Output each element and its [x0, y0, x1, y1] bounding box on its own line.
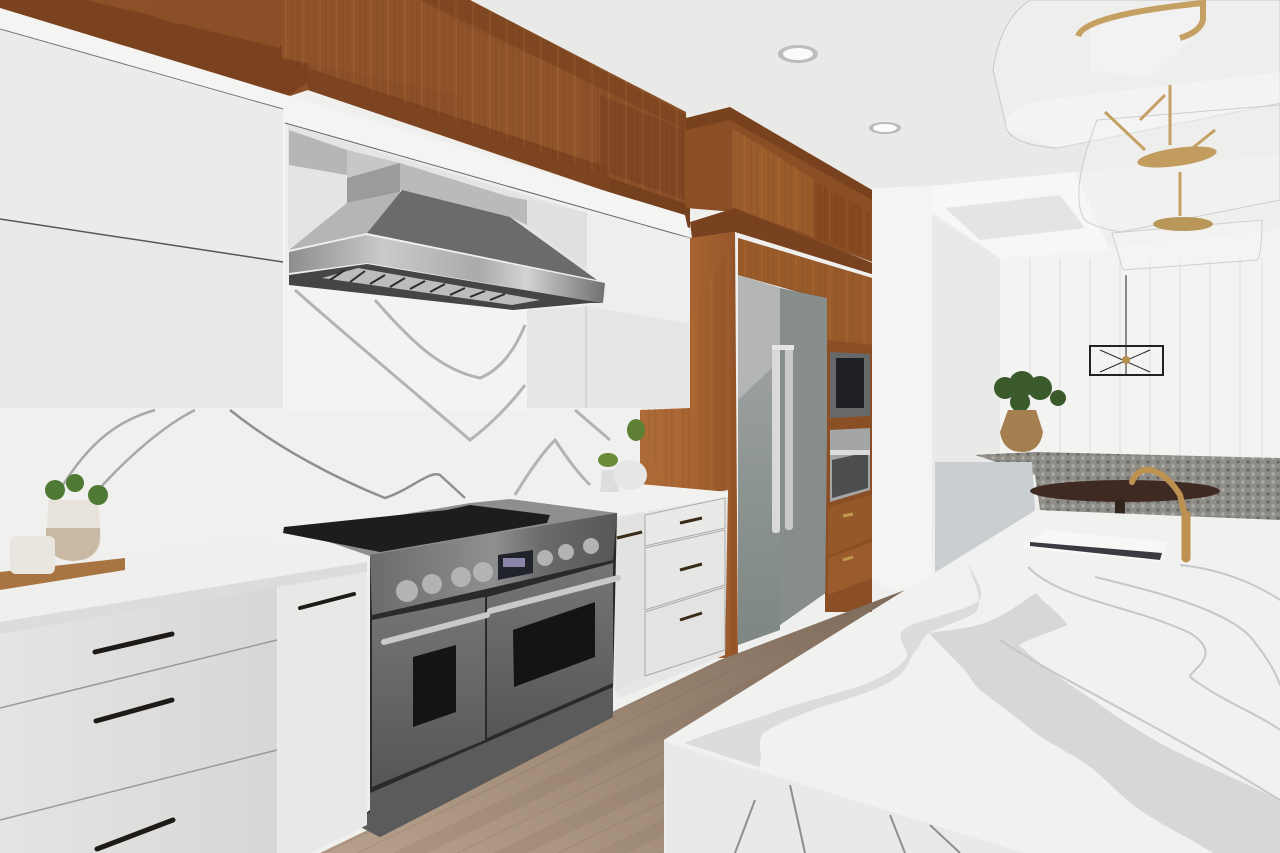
icon: potted plant and canister on tray — [0, 474, 125, 590]
icon: french-door refrigerator — [738, 275, 827, 645]
panel: left upper cabinets — [0, 8, 690, 408]
panel: right upper cabinets — [527, 213, 690, 408]
icon: small plants and vases — [598, 419, 647, 492]
panel: banquette and dining table — [935, 452, 1280, 572]
panel: floor — [320, 590, 905, 853]
icon: glass pendant lamps — [993, 0, 1280, 270]
recessed ceiling lights — [778, 45, 901, 134]
icon: gold faucet — [1132, 470, 1186, 558]
panel: marble backsplash — [0, 280, 640, 560]
icon: pendant lantern — [1090, 275, 1163, 375]
panel: right base cabinets — [614, 490, 728, 698]
panel: right countertop — [520, 484, 728, 517]
icon: range hood — [288, 125, 605, 310]
panel: wood column beside fridge — [640, 232, 872, 658]
panel: wood soffit — [0, 0, 690, 228]
icon: undermount sink — [1020, 530, 1168, 562]
icon: plant in basket — [994, 371, 1066, 452]
panel: left countertop — [0, 534, 367, 634]
icon: dual-oven gas range — [283, 499, 618, 837]
panel: marble island — [664, 510, 1280, 853]
panel: left base cabinets — [0, 562, 367, 853]
panel: back room wall — [872, 172, 1280, 592]
icon: built-in coffee machine and wall oven — [825, 340, 872, 612]
panel: upper wood bulkhead — [686, 107, 880, 276]
